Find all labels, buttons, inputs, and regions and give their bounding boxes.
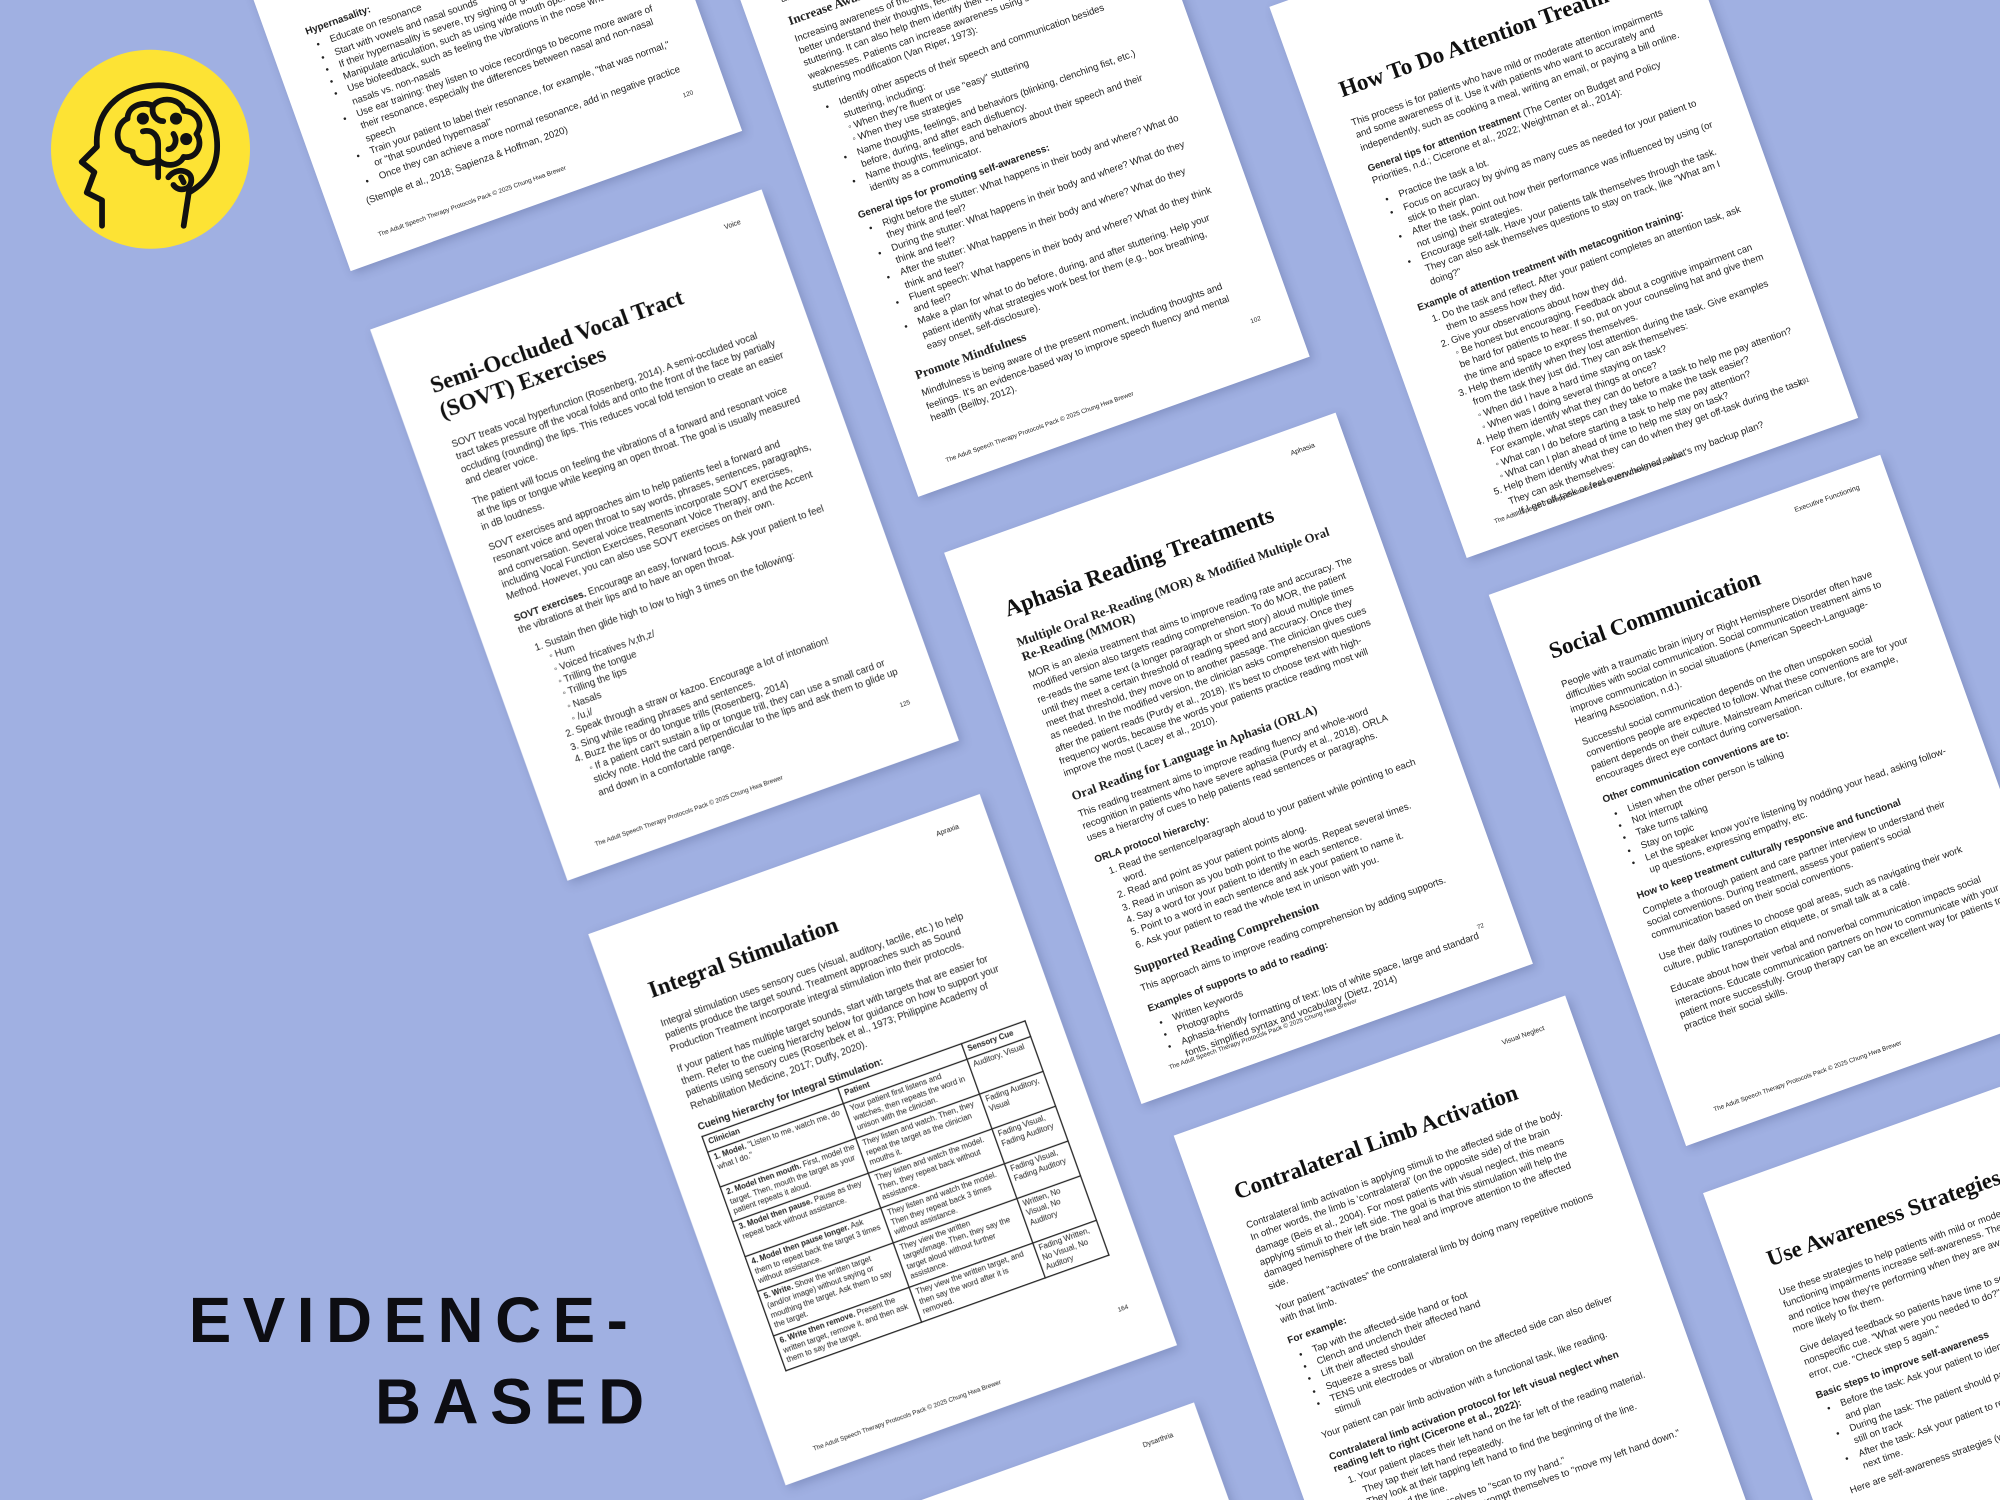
page: aphasia reading treatments: This reading treatment aims to improve reading fluency and whole-word recognition in patients who have severe aphasia (Purdy et al., 2018). ORLA uses a hierarchy of cues to help patients read sentences or paragraphs. <box>1076 705 1389 844</box>
table: cueing hierarchy: They view the written target, and then say the word after it is removed. <box>915 1251 1025 1317</box>
table: cueing hierarchy: They view the written target/image. Then, they say the target aloud without further assistance. <box>899 1216 1012 1282</box>
page: dysarthria (bottom, cut off) <box>803 1402 1391 1500</box>
table: cueing hierarchy: 6. Write then remove. Present the written target, remove it, and then ask them to say the target. <box>779 1297 910 1366</box>
page: increase awareness: Identify other aspects of their speech and communication besides stuttering, including: <box>837 2 1106 120</box>
page: how to do attention treatment: General tips for attention treatment (The Center on Budget and Policy Priorities, n.d.; Cicerone et al., 2022; Weightman et al., 2014): <box>1366 58 1662 186</box>
page: aphasia reading treatments: The Adult Speech Therapy Protocols Pack © 2025 Chung Hwa Brewer <box>1168 997 1358 1072</box>
page: integral stimulation: Cueing hierarchy for Integral Stimulation: <box>696 1056 885 1133</box>
page: hypernasality (top-left, cut off): 120 <box>682 89 694 100</box>
page: how to do attention treatment: ◦ What can I plan ahead of time to help me stay on task? <box>1498 389 1730 482</box>
page: contralateral limb activation: For example: <box>1286 1315 1348 1347</box>
page: how to do attention treatment: After the task, point out how their performance was influenced by using (or not using) their strategies. <box>1410 119 1714 250</box>
page: aphasia reading treatments: Aphasia-friendly formatting of text: lots of white space, large and standard fonts, simplified syntax and vocabulary (Dietz, 2014) <box>1180 930 1480 1059</box>
page: increase awareness: Fluent speech: What happens in their body and where? What do they think and feel? <box>907 184 1213 315</box>
page: how to do attention treatment: Focus on accuracy by giving as many cues as needed for your patient to stick to their plan. <box>1401 97 1698 225</box>
page: hypernasality (top-left, cut off): (Stemple et al., 2018; Sapienza & Hoffman, 2020) <box>364 124 569 206</box>
table: cueing hierarchy: Written, No Visual, No Auditory <box>1022 1187 1062 1228</box>
table: cueing hierarchy: Fading Visual, Fading Auditory <box>1010 1149 1068 1184</box>
table: cueing hierarchy: Clinician <box>707 1127 741 1147</box>
table: cueing hierarchy: 3. Model then pause. Pause as they repeat back without assistance. <box>738 1180 863 1242</box>
page: SOVT exercises: ◦ Nasals <box>565 689 603 712</box>
page: integral stimulation: If your patient has multiple target sounds, start with targets that are easier for them. Refer to the cueing hierarchy below for guidance on how to support your patients using sensory cues (Rosenbek et al., 1973; Philippine Academy of Rehabilitation Medicine, 2017; Duffy, 2020). <box>675 953 1000 1112</box>
page: social communication: Successful social communication depends on the often unspoken social conventions people are expected to follow. What these conventions are for your patient depends on their culture. Mainstream American culture, for example, encourages direct eye contact during conversation. <box>1580 633 1910 785</box>
page: contralateral limb activation: Your patient places their left hand on the far left of the reading material. They tap their left hand repeatedly. <box>1356 1369 1647 1495</box>
page: SOVT exercises: Voice <box>723 219 742 232</box>
page: how to do attention treatment: Encourage self-talk. Have your patients talk themselves through the task. They can also ask themselves questions to stay on track, like "What am I doing?" <box>1419 146 1722 287</box>
page: contralateral limb activation: Your patient "activates" the contralateral limb by doing many repetitive motions with that limb. <box>1274 1189 1594 1326</box>
page: hypernasality (top-left, cut off): Once they can achieve a more normal resonance, add in negative practice <box>377 63 681 181</box>
table: cueing hierarchy: They listen and watch. Then, they repeat the target as the clinician mouths it. <box>862 1101 976 1168</box>
page: SOVT exercises: ◦ Hum <box>548 642 577 662</box>
page: how to do attention treatment: ◦ If I get off-task or feel overwhelmed, what's my backup plan? <box>1511 419 1765 519</box>
page: SOVT exercises: ◦ If a patient can't sustain a lip or tongue trill, they can use a small card or sticky note. Hold the card perpendicular to the lips and ask them to glide up and down in a comfortable range. <box>588 657 899 798</box>
page: social communication: Not interrupt <box>1630 797 1684 826</box>
page: social communication: People with a traumatic brain injury or Right Hemisphere Disorder often have difficulties with social communication. Social communication treatment aims to improve communication in social situations (American Speech-Language-Hearing Association, n.d.). <box>1560 568 1883 727</box>
page: increase awareness: Name thoughts, feelings, and behaviors (blinking, clenching fist, etc.) before, during, and after each disfluency. <box>855 47 1137 169</box>
page: how to do attention treatment: The Adult Speech Therapy Protocols Pack © 2025 Chung Hwa Brewer <box>1493 451 1683 526</box>
table: cueing hierarchy: Sensory Cue <box>967 1030 1015 1054</box>
page: use awareness strategies: Use Awareness Strategies <box>1763 1164 2000 1271</box>
page: how to do attention treatment: ◦ Be honest but encouraging. Feedback about a cognitive impairment can be hard for patients to hear. If so, put on your counseling hat and give them the time and space to express themselves. <box>1454 241 1765 383</box>
page: hypernasality (top-left, cut off): Train your patient to label their resonance, for example, "that was normal," or "that sounded hypernasal" <box>368 38 671 169</box>
table: cueing hierarchy: Fading Visual, Fading Auditory <box>997 1114 1055 1149</box>
page: use awareness strategies: Basic steps to improve self-awareness <box>1814 1329 1990 1401</box>
page: integral stimulation: Integral stimulation uses sensory cues (visual, auditory, tactile, etc.) to help patients produce the target sound. Treatment approaches such as Sound Production Treatment incorporate integral stimulation into their protocols. <box>659 910 965 1054</box>
page: contralateral limb activation: Visual Neglect <box>1501 1025 1546 1047</box>
page: hypernasality (top-left, cut off) <box>153 0 742 271</box>
page: social communication: Other communication conventions are to: <box>1601 728 1791 806</box>
page: aphasia reading treatments: 72 <box>1476 922 1485 931</box>
page: SOVT exercises: ◦ /u,i/ <box>570 706 594 724</box>
page: social communication: Stay on topic <box>1639 821 1695 851</box>
page: hypernasality (top-left, cut off): Educate on resonance <box>328 2 423 45</box>
page: increase awareness: Make a plan for what to do before, during, and after stuttering. Help your patient identify what strategies work best for them (e.g., box breathing, easy onset, self-disclosure). <box>916 212 1211 352</box>
page: increase awareness: Name thoughts, feelings, and behaviors about their speech and their identity as a communicator. <box>864 72 1144 194</box>
page: aphasia reading treatments: Read in unison as you both point to the words. Repeat several times. <box>1130 799 1413 910</box>
page: aphasia reading treatments: MOR is an alexia treatment that aims to improve reading rate and accuracy. The modified version also targets reading comprehension. To do MOR, the patient re-reads the same text (a longer paragraph or short story) aloud multiple times until they meet a certain threshold of reading speed and accuracy. Once they meet that threshold, they move on to another passage. The clinician gives cues as needed. In the modified version, the clinician asks comprehension questions after the patient reads (Purdy et al., 2018). It's best to choose text with high-frequency words, because the words your patients practice reading most will improve the most (Lacey et al., 2010). <box>1027 554 1372 779</box>
page: SOVT exercises: SOVT exercises and approaches aim to help patients feel a forward and resonant voice and open throat to say words, phrases, sentences, paragraphs, and conversation. Several voice treatments incorporate SOVT exercises, including Vocal Function Exercises, Resonant Voice Therapy, and the Accent Method. However, you can also use SOVT exercises on their own. <box>487 438 814 603</box>
page: contralateral limb activation: Clench and unclench their affected hand <box>1315 1298 1482 1367</box>
table: cueing hierarchy <box>701 1020 1110 1372</box>
page: how to do attention treatment <box>1269 0 1858 558</box>
page: how to do attention treatment: Help them identify what they can do before a task to help me pay attention? For example, what steps can they take to make the task easier? <box>1485 325 1793 457</box>
page: increase awareness: Mindfulness is being aware of the present moment, including thoughts and feelings. It's an evidence-based way to improve speech fluency and mental health (Beilby, 2012). <box>920 281 1231 424</box>
page: social communication: Use their daily routines to choose goal areas, such as navigating their work culture, public transportation etiquette, or small talk at a café. <box>1657 843 1964 975</box>
page: SOVT exercises: ◦ Voiced fricatives /v,th,z/ <box>552 628 656 675</box>
page: use awareness strategies <box>1703 1053 2000 1500</box>
page: increase awareness: 102 <box>1249 315 1262 325</box>
page: how to do attention treatment: ◦ When was I doing several things at once? <box>1480 359 1659 432</box>
page: contralateral limb activation: Contralateral limb activation protocol for left visual neglect when reading left to right (Cicerone et al., 2022): <box>1327 1348 1620 1475</box>
page: social communication: Social Communication <box>1545 565 1764 664</box>
page: hypernasality (top-left, cut off): Hypernasality: <box>304 3 372 37</box>
page: hypernasality (top-left, cut off): Use ear training: they listen to voice recordings to become more aware of their resonance, especially the differences between nasal and non-nasal speech <box>355 3 655 144</box>
page: how to do attention treatment: ◦ What can I do before starting a task to help me pay attention? <box>1493 367 1752 469</box>
page: SOVT exercises: Sustain then glide high to low to high 3 times on the following: <box>543 550 796 650</box>
table: cueing hierarchy: 2. Model then mouth. First, model the target. Then, mouth the target as your patient repeats it aloud. <box>726 1143 857 1217</box>
page: aphasia reading treatments: Read and point as your patient points along. <box>1126 823 1308 897</box>
page: increase awareness: After the stutter: What happens in their body and where? What do they think and feel? <box>898 165 1187 290</box>
page: how to do attention treatment: Example of attention treatment with metacognition training: <box>1416 207 1685 313</box>
page: integral stimulation: 164 <box>1117 1303 1129 1314</box>
page: increase awareness: Right before the stutter: What happens in their body and where? What do they think and feel? <box>881 112 1180 241</box>
page: increase awareness <box>721 0 1310 497</box>
page: contralateral limb activation: Contralateral Limb Activation <box>1230 1079 1521 1204</box>
page: contralateral limb activation: Your patient can pair limb activation with a functional task, like reading. <box>1320 1329 1609 1442</box>
page: social communication: The Adult Speech Therapy Protocols Pack © 2025 Chung Hwa Brewer <box>1713 1039 1903 1114</box>
page: increase awareness: ◦ When they're fluent or use "easy" stuttering <box>846 57 1030 132</box>
page: hypernasality (top-left, cut off): The Adult Speech Therapy Protocols Pack © 2025 Chung Hwa Brewer <box>377 164 567 239</box>
page: contralateral limb activation: Squeeze a stress ball <box>1324 1350 1415 1392</box>
page: SOVT exercises: ◦ Trilling the lips <box>561 666 628 699</box>
page: aphasia reading treatments: ORLA protocol hierarchy: <box>1093 813 1211 865</box>
page: social communication <box>1489 455 2000 1146</box>
page: aphasia reading treatments: Multiple Oral Re-Reading (MOR) & Modified Multiple Oral Re-Reading (MMOR) <box>1015 525 1332 665</box>
page: SOVT exercises: ◦ Trilling the tongue <box>557 648 638 687</box>
page: aphasia reading treatments: Oral Reading for Language in Aphasia (ORLA) <box>1070 703 1319 804</box>
page: how to do attention treatment: This process is for patients who have mild or moderate attention impairments and some awareness of it. Use it with patients who want to accurately and independently, such as cooking a meal, writing an email, or paying a bill online. <box>1350 6 1681 153</box>
page: aphasia reading treatments: Ask your patient to read the whole text in unison with you. <box>1144 853 1380 947</box>
page: integral stimulation: Integral Stimulation <box>645 912 841 1003</box>
page: increase awareness: General tips for promoting self-awareness: <box>856 141 1051 221</box>
page: aphasia reading treatments: Photographs <box>1175 1005 1231 1035</box>
page: SOVT exercises <box>370 189 959 881</box>
page: SOVT exercises: SOVT exercises. Encourage an easy, forward focus. Ask your patient to feel the vibrations at their lips and to have an open throat. <box>512 502 825 636</box>
table: cueing hierarchy: 4. Model then pause longer. Ask them to repeat back the target 3 times without assistance. <box>750 1219 882 1286</box>
page: integral stimulation: Apraxia <box>935 824 960 839</box>
page: social communication: Take turns talking <box>1634 802 1709 838</box>
page: dysarthria (bottom, cut off): Dysarthria <box>1142 1432 1175 1450</box>
page: contralateral limb activation: Lift their affected shoulder <box>1319 1331 1428 1379</box>
table: cueing hierarchy: Fading Written, No Visual, No Auditory <box>1038 1227 1091 1273</box>
table: cueing hierarchy: They listen and watch the model. Then they repeat back 3 times without assistance. <box>887 1171 998 1238</box>
page: increase awareness: ◦ When they use strategies <box>851 95 963 145</box>
page: social communication: How to keep treatment culturally responsive and functional <box>1635 797 1903 902</box>
title: evidence-based: BASED <box>375 1366 656 1437</box>
page: aphasia reading treatments: Written keywords <box>1171 987 1244 1022</box>
page: contralateral limb activation <box>1174 996 1763 1500</box>
table: cueing hierarchy: Fading Auditory, Visual <box>985 1077 1041 1114</box>
table: cueing hierarchy: Patient <box>844 1081 871 1098</box>
table: cueing hierarchy: 1. Model. "Listen to me, watch me, do what I do." <box>713 1109 841 1172</box>
page: aphasia reading treatments <box>944 413 1533 1104</box>
table: cueing hierarchy: 5. Write. Show the written target (and/or image) without saying or mouthing the target. Ask them to say the target. <box>763 1255 893 1331</box>
page: how to do attention treatment: Help them identify what they can do when they get off-task during the task. They can ask themselves: <box>1502 376 1807 507</box>
page: how to do attention treatment: Give your observations about how they did. <box>1449 272 1628 346</box>
table: cueing hierarchy: They listen and watch the model. Then, they repeat back without assistance. <box>874 1136 986 1203</box>
page: increase awareness: During the stutter: What happens in their body and where? What do they think and feel? <box>889 138 1186 266</box>
page: aphasia reading treatments: Aphasia <box>1290 442 1316 458</box>
page: social communication: Let the speaker know you're listening by nodding your head, asking follow-up questions, expressing empathy, etc. <box>1643 745 1947 875</box>
page: how to do attention treatment: Practice the task a lot. <box>1397 157 1491 200</box>
page: aphasia reading treatments: Say a word for your patient to identify in each sentence. <box>1135 831 1363 922</box>
table: cueing hierarchy: Your patient first listens and watches, then repeats the word in unison with the clinician. <box>849 1073 967 1133</box>
page: aphasia reading treatments: Examples of supports to add to reading: <box>1146 939 1330 1014</box>
page: how to do attention treatment: ◦ When did I have a hard time staying on task? <box>1476 342 1668 420</box>
page: aphasia reading treatments: This approach aims to improve reading comprehension by adding supports. <box>1139 874 1447 994</box>
page: integral stimulation <box>588 794 1177 1485</box>
page: how to do attention treatment: Do the task and reflect. After your patient completes an attention task, ask them to assess how they did. <box>1440 204 1742 333</box>
page: how to do attention treatment: Help them identify when they lost attention during the task. Give examples from the task they just did. They can ask themselves: <box>1467 277 1770 408</box>
page: how to do attention treatment: 191 <box>1798 376 1811 387</box>
page: contralateral limb activation: TENS unit electrodes or vibration on the affected side can also deliver stimuli <box>1328 1292 1614 1416</box>
title: evidence-based <box>189 1284 656 1437</box>
page: increase awareness: Promote Mindfulness <box>914 331 1028 383</box>
page: SOVT exercises: 125 <box>899 699 911 709</box>
page: contralateral limb activation: Tap with the affected-side hand or foot <box>1310 1288 1469 1354</box>
icon: brain logo <box>51 50 250 249</box>
page: social communication: Executive Functioning <box>1794 484 1861 515</box>
page: social communication: Complete a thorough patient and care partner interview to understand their social conventions. During treatment, assess your patient's social communication based on their social conventions. <box>1641 798 1946 941</box>
page: increase awareness: The Adult Speech Therapy Protocols Pack © 2025 Chung Hwa Brewer <box>945 390 1135 464</box>
title: evidence-based: EVIDENCE- <box>189 1284 639 1356</box>
page: SOVT exercises: Buzz the lips or do tongue trills (Rosenberg, 2014) <box>583 678 790 761</box>
page: SOVT exercises: Speak through a straw or kazoo. Encourage a lot of intonation! <box>574 635 831 736</box>
page: SOVT exercises: Sing while reading phrases and sentences. <box>579 676 756 749</box>
page: SOVT exercises: Semi-Occluded Vocal Tract (SOVT) Exercises <box>427 284 687 424</box>
page: aphasia reading treatments: Point to a word in each sentence and ask your patient to name it. <box>1139 830 1405 934</box>
table: cueing hierarchy: Auditory, Visual <box>972 1043 1026 1070</box>
page: contralateral limb activation: Contralateral limb activation is applying stimuli to the affected side of the body. In other words, the limb is 'contralateral' (on the opposite side) of the brain damage (Beis et al., 2004). For most patients with visual neglect, this means applying stimuli to their left side. The goal is that this stimulation will help the damaged hemisphere of the brain heal and improve attention to the affected side. <box>1245 1107 1573 1293</box>
page: SOVT exercises: The Adult Speech Therapy Protocols Pack © 2025 Chung Hwa Brewer <box>594 774 784 848</box>
page: SOVT exercises: The patient will focus on feeling the vibrations of a forward and resonant voice at the lips or tongue while keeping an open throat. The goal is usually measured in dB loudness. <box>471 384 802 533</box>
page: SOVT exercises: SOVT treats vocal hyperfunction (Rosenberg, 2014). A semi-occluded vocal tract takes pressure off the vocal folds and onto the front of the face by partially occluding (rounding) the lips. This reduces vocal fold tension to create an easier and clearer voice. <box>450 330 785 487</box>
page: integral stimulation: The Adult Speech Therapy Protocols Pack © 2025 Chung Hwa Brewer <box>812 1379 1002 1453</box>
page: aphasia reading treatments: Supported Reading Comprehension <box>1132 899 1321 978</box>
page: social communication: Educate about how their verbal and nonverbal communication impacts social interactions. Educate communication partners on how to communicate with your patient more successfully. Group therapy can be an excellent way for patients to practice their social skills. <box>1669 874 2000 1032</box>
page: social communication: Listen when the other person is talking <box>1626 747 1785 814</box>
page: aphasia reading treatments: Read the sentence/paragraph aloud to your patient while pointing to each word. <box>1117 756 1417 885</box>
page: aphasia reading treatments: Aphasia Reading Treatments <box>1001 502 1277 622</box>
